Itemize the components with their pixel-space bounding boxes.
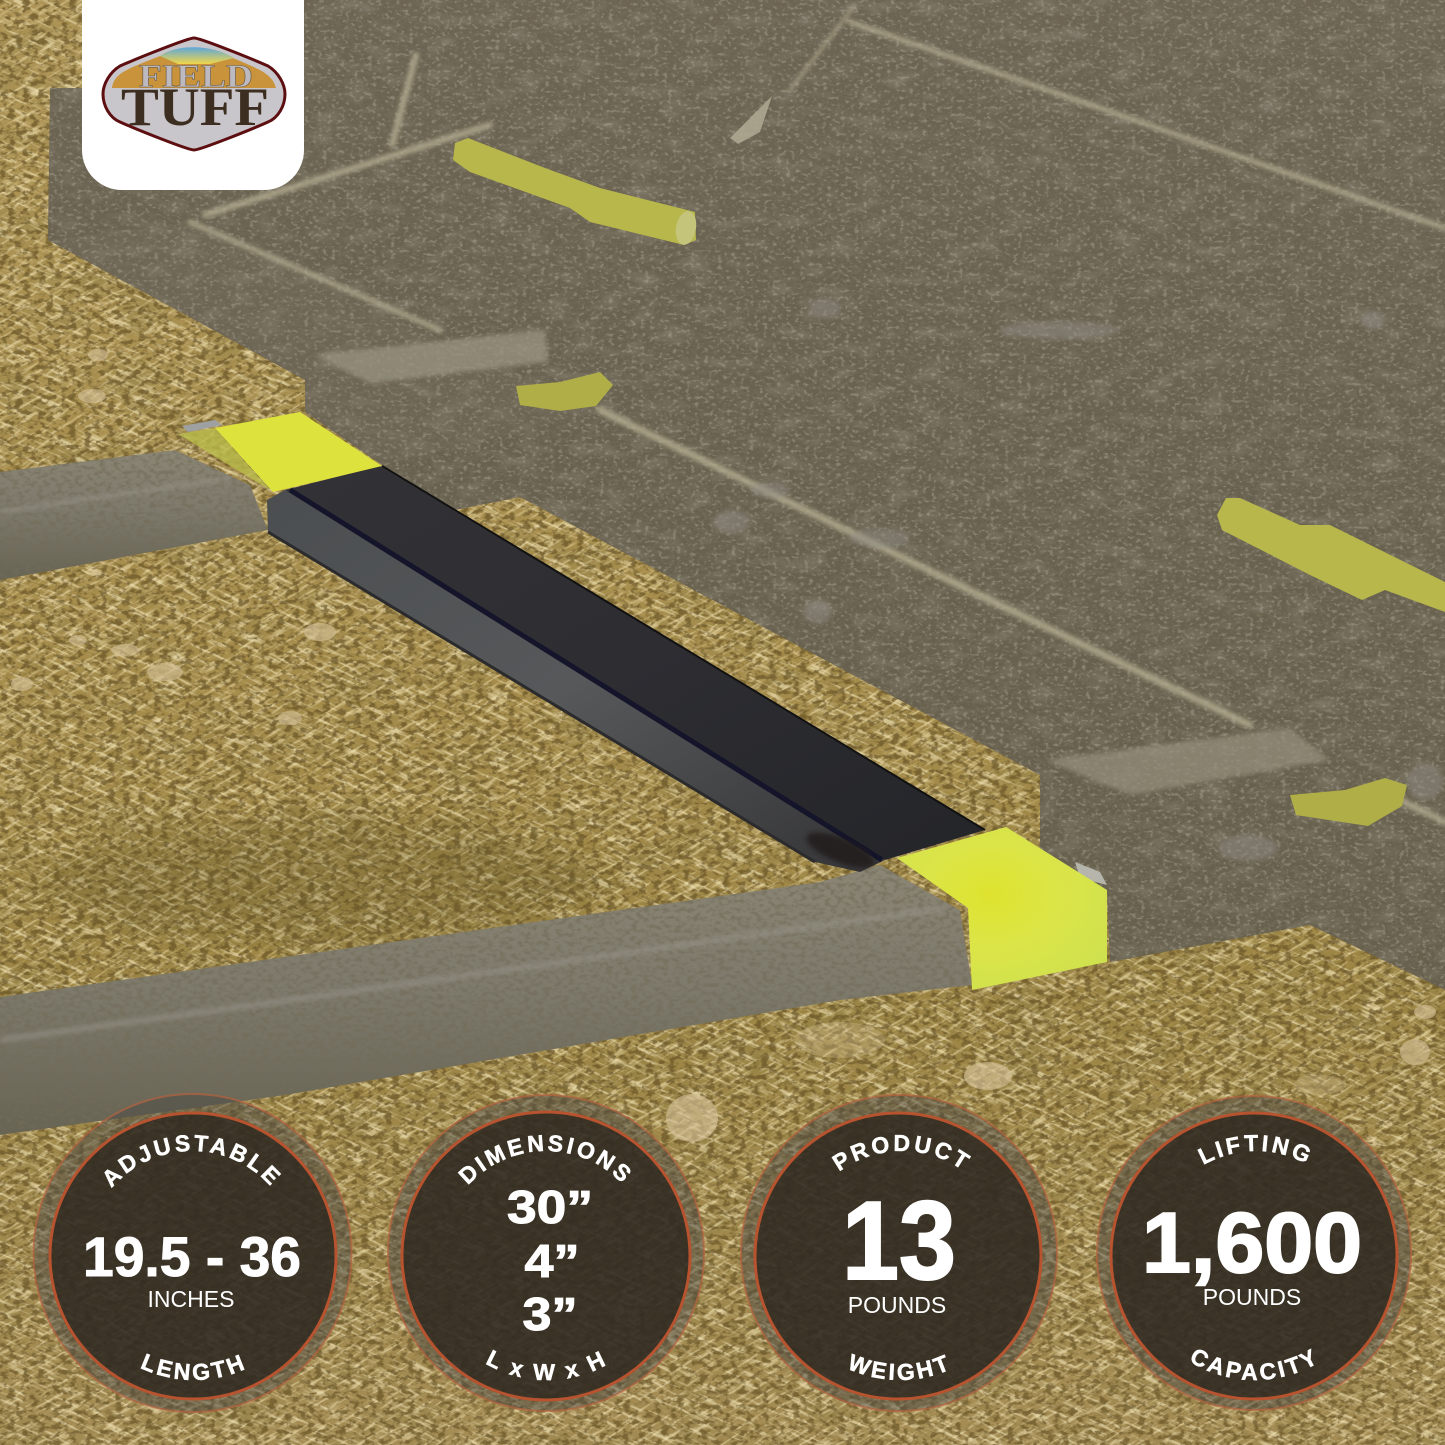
logo wordmark TUFF: TUFF [121,77,269,137]
tube centre edge [290,490,882,860]
ghost tip [730,96,772,144]
badge: adjustable length [32,1093,352,1413]
badge heading: ADJUSTABLE [104,1134,282,1188]
lime bracket cap, near end [897,827,1107,990]
badge length value: 30” [507,1181,593,1233]
ghost lines on the ground [190,5,1445,822]
logo badge [82,0,304,190]
concrete beam, lower [0,860,980,1140]
badge heading: DIMENSIONS [458,1134,630,1185]
badge value: 1,600 [1142,1196,1362,1291]
badge unit: POUNDS [848,1292,946,1318]
badge footer: WEIGHT [850,1353,946,1380]
ghost yellow bracket end, upper [516,372,613,411]
ghost yellow tube, right [1217,498,1445,612]
ghost yellow bracket end, right [1290,778,1407,826]
badge footer: CAPACITY [1192,1348,1314,1380]
ghost slab upper [315,330,548,383]
badge: dimensions [387,1094,705,1412]
logo shield [103,38,285,150]
ghosted ground cutaway [0,0,1445,1000]
badge: product weight [740,1094,1058,1412]
badge height value: 3” [522,1288,578,1340]
lime bracket cap, far end [178,412,382,492]
concrete beam, upper left [0,450,268,580]
badge value: 13 [842,1179,956,1303]
logo wordmark FIELD: FIELD [139,59,253,95]
black steel bracket tube [267,466,985,875]
badge footer: L x W x H [486,1350,606,1380]
tube side face [267,490,885,872]
badge footer: LENGTH [140,1353,245,1380]
ghost slab lower [1045,728,1330,795]
badge width value: 4” [524,1235,580,1287]
ghost stones [714,298,1443,861]
badge: lifting capacity [1096,1095,1412,1411]
badge heading: PRODUCT [832,1134,971,1172]
tube top plate [285,466,985,860]
badge unit: POUNDS [1203,1284,1301,1310]
badge heading: LIFTING [1197,1134,1310,1164]
badge unit: INCHES [148,1286,234,1312]
badge value: 19.5 - 36 [83,1225,301,1288]
ghost yellow tube, upper [453,138,699,246]
